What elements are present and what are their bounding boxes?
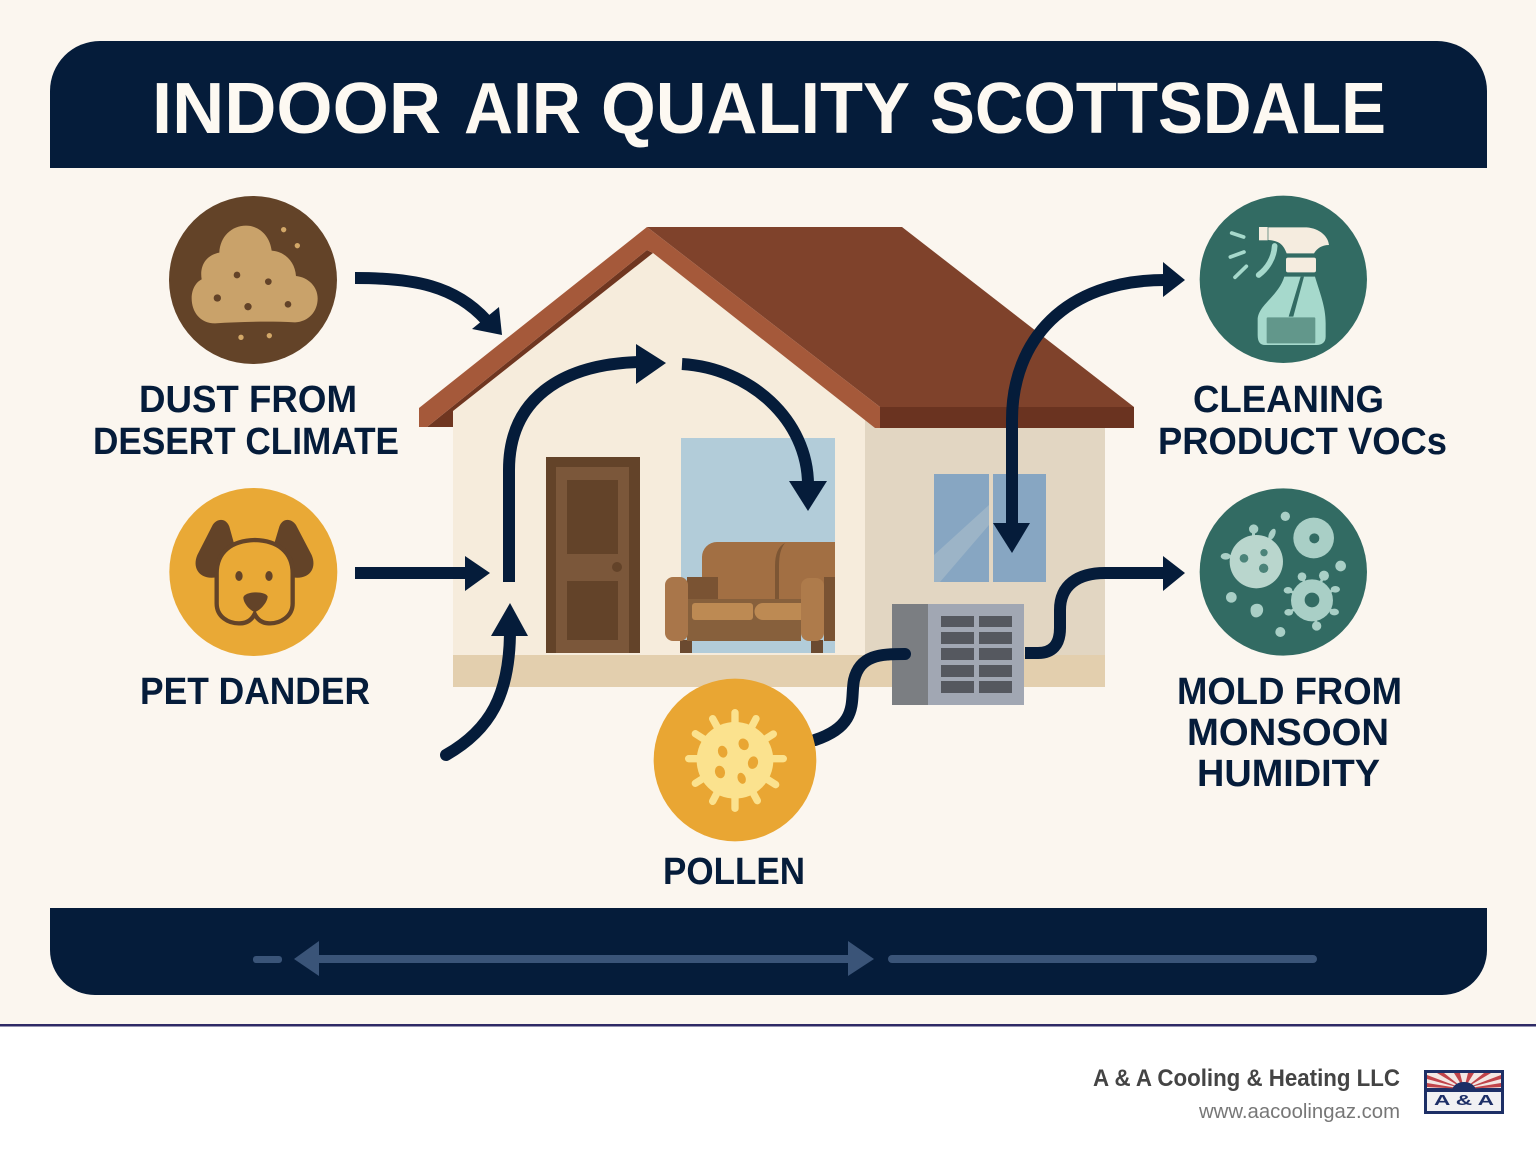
air conditioner unit (892, 604, 1024, 705)
house front wall (453, 253, 865, 687)
label: cleaning product VOCs: PRODUCT VOCs (1158, 421, 1447, 463)
label: mold from monsoon humidity: MOLD FROM (1177, 671, 1402, 713)
side window (934, 474, 1046, 582)
label: cleaning product VOCs (1158, 379, 1447, 463)
title: INDOOR (152, 69, 441, 149)
house illustration (419, 227, 1134, 705)
arrows: air flow (355, 262, 1185, 755)
footer (0, 1024, 1536, 1154)
arrow: AC to mold (1025, 556, 1185, 653)
arrow: pet dander into house (355, 556, 490, 591)
roof (419, 227, 1134, 428)
title (152, 69, 1386, 149)
arrow: pollen to AC (815, 654, 905, 740)
logo: A & A (1434, 1092, 1494, 1109)
door (546, 457, 640, 653)
label: dust from desert climate (93, 379, 399, 463)
arrow: circulating up and over (509, 344, 666, 582)
logo (1424, 1070, 1504, 1114)
arrow: dust into house (355, 278, 502, 335)
arrow: from outside up to house (446, 603, 528, 755)
icon: dust (169, 196, 337, 364)
arrow: circulating down to living room (682, 364, 827, 511)
living room window (681, 438, 835, 653)
sofa (665, 542, 835, 653)
icon: mold (1200, 488, 1367, 656)
label: mold from monsoon humidity: HUMIDITY (1197, 753, 1380, 795)
label: cleaning product VOCs: CLEANING (1193, 379, 1384, 421)
icon: dog (169, 488, 337, 656)
banner arrows (253, 941, 1317, 976)
house right wall (865, 419, 1105, 687)
title: SCOTTSDALE (930, 69, 1386, 149)
company name: A & A Cooling & Heating LLC (1093, 1065, 1400, 1092)
icon: spray bottle (1200, 196, 1367, 363)
title: QUALITY (601, 69, 910, 149)
bottom banner (50, 908, 1487, 995)
label: dust from desert climate: DESERT CLIMATE (93, 421, 399, 463)
label: mold from monsoon humidity (1177, 671, 1402, 795)
title: AIR (464, 69, 581, 149)
website: www.aacoolingaz.com (1198, 1101, 1400, 1123)
label: mold from monsoon humidity: MONSOON (1187, 712, 1389, 754)
floor (453, 655, 1105, 687)
label: pet dander: PET DANDER (140, 671, 370, 713)
label: pollen: POLLEN (663, 851, 805, 893)
icon: pollen (654, 679, 816, 841)
title banner (50, 41, 1487, 168)
arrow: cleaning product VOCs (993, 262, 1185, 553)
label: dust from desert climate: DUST FROM (139, 379, 357, 421)
